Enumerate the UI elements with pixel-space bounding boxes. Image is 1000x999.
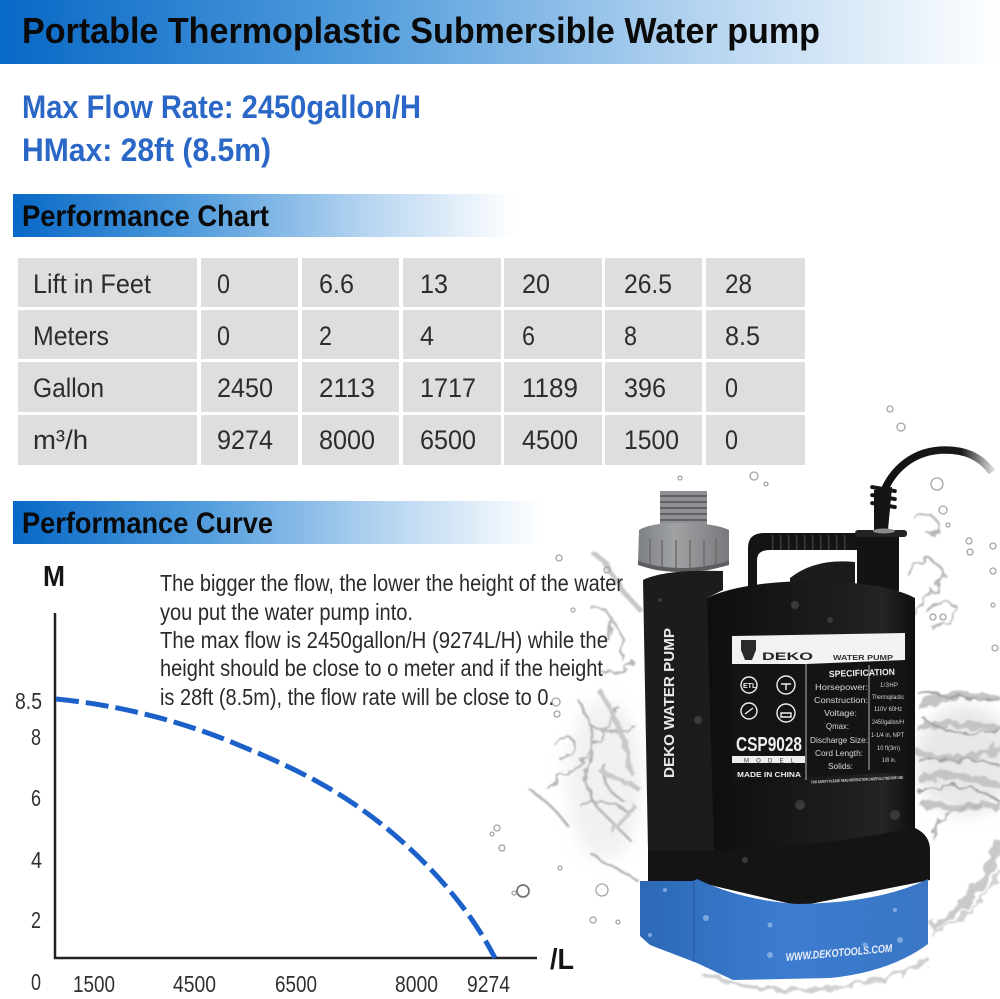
model: CSP9028 xyxy=(736,734,802,756)
performance table: 0 xyxy=(725,425,738,455)
spec table: Qmax: xyxy=(826,722,849,731)
specification label xyxy=(732,633,905,785)
outlet column xyxy=(643,571,723,850)
y axis tick labels: 2 xyxy=(31,907,41,933)
performance table: 2450 xyxy=(217,373,273,403)
performance table: 0 xyxy=(217,269,230,299)
base web address: WWW.DEKOTOOLS.COM xyxy=(785,943,894,964)
y axis tick labels: 4 xyxy=(31,847,42,873)
spec table xyxy=(810,667,904,771)
performance table: 4500 xyxy=(522,425,578,455)
spec table: SPECIFICATION xyxy=(829,667,895,679)
specification label: FOR SAFETY PLEASE READ INSTRUCTION CAREFULLY BEFORE USE xyxy=(811,775,903,785)
section heading: Performance Chart xyxy=(13,194,515,237)
performance table: 1500 xyxy=(624,425,679,455)
key specs text: HMax: 28ft (8.5m) xyxy=(22,132,271,168)
spec table: Solids: xyxy=(828,762,853,771)
explanatory text: The bigger the flow, the lower the height of the water xyxy=(160,570,623,596)
certification icons xyxy=(741,676,795,722)
side text: DEKO WATER PUMP xyxy=(661,628,678,778)
power cable xyxy=(882,450,992,496)
key specs text: Max Flow Rate: 2450gallon/H xyxy=(22,89,421,125)
performance table: 8000 xyxy=(319,425,375,455)
x axis unit: /L xyxy=(550,944,574,976)
main body xyxy=(707,581,915,870)
performance table: 9274 xyxy=(217,425,273,455)
specification label: MODEL xyxy=(744,758,795,764)
performance table: 2113 xyxy=(319,373,375,403)
handle xyxy=(748,528,907,592)
specification label: MADE IN CHINA xyxy=(737,772,801,779)
section heading: Performance Curve: Performance Curve xyxy=(22,507,273,540)
spec table: 110V 60Hz xyxy=(874,707,902,713)
water pump illustration xyxy=(638,450,992,980)
gray union nut xyxy=(638,523,729,572)
spec table: Construction: xyxy=(814,696,868,705)
water splash background xyxy=(490,406,1000,990)
dashed curve xyxy=(56,699,495,958)
y axis tick labels: 8.5 xyxy=(15,688,42,714)
spec table: 1-1/4 in. NPT xyxy=(871,733,904,739)
spec table: Discharge Size: xyxy=(810,736,868,745)
y axis tick labels: 8 xyxy=(31,724,41,750)
specification label: WATER PUMP xyxy=(833,655,893,662)
header band: title xyxy=(0,0,1000,64)
spec table: 1/3HP xyxy=(880,683,898,689)
spec table: 1/8 in. xyxy=(882,758,896,764)
performance table: 2 xyxy=(319,321,332,351)
explanatory text: is 28ft (8.5m), the flow rate will be close to 0. xyxy=(160,684,554,710)
section heading: Performance Chart: Performance Chart xyxy=(22,200,269,233)
cable strain relief xyxy=(870,485,897,530)
performance table: 6.6 xyxy=(319,269,354,299)
performance table: 0 xyxy=(725,373,738,403)
y axis tick labels: 6 xyxy=(31,785,41,811)
axes xyxy=(55,613,537,958)
water droplets xyxy=(648,888,903,958)
performance table: m³/h xyxy=(33,425,88,455)
performance table: 20 xyxy=(522,269,550,299)
title: Portable Thermoplastic Submersible Water pump xyxy=(22,10,820,51)
x axis tick labels: 9274 xyxy=(467,971,510,997)
performance table: 4 xyxy=(420,321,434,351)
spec table: Voltage: xyxy=(824,709,857,718)
performance table: 6500 xyxy=(420,425,476,455)
spec table: Thermoplastic xyxy=(872,695,904,701)
x axis tick labels: 6500 xyxy=(275,971,317,997)
performance table: 8 xyxy=(624,321,637,351)
key specs text xyxy=(22,89,421,168)
spec table: 2450gallon/H xyxy=(872,720,904,726)
explanatory text xyxy=(160,570,623,710)
x axis tick labels xyxy=(73,971,510,997)
y axis tick labels: 0 xyxy=(31,969,41,995)
water bubbles xyxy=(490,406,998,924)
black flange xyxy=(648,828,930,906)
performance table: 396 xyxy=(624,373,666,403)
performance table: 28 xyxy=(725,269,752,299)
performance table: 1189 xyxy=(522,373,578,403)
spec table: 10 ft(3m) xyxy=(877,746,900,752)
x axis tick labels: 1500 xyxy=(73,971,115,997)
x axis tick labels: 8000 xyxy=(395,971,438,997)
brand logo: DEKO xyxy=(762,651,814,663)
y axis tick labels xyxy=(15,688,42,995)
performance table: 0 xyxy=(217,321,230,351)
performance table: 8.5 xyxy=(725,321,760,351)
threaded outlet xyxy=(660,491,707,525)
section heading: Performance Curve xyxy=(13,501,543,544)
explanatory text: you put the water pump into. xyxy=(160,599,413,625)
blue base xyxy=(640,879,928,980)
performance table: Meters xyxy=(33,321,109,351)
brand logo xyxy=(741,640,814,663)
performance table: Lift in Feet xyxy=(33,269,151,299)
performance table: 6 xyxy=(522,321,535,351)
performance table: 26.5 xyxy=(624,269,672,299)
spec table: Cord Length: xyxy=(815,749,863,758)
specification label: ETL xyxy=(743,683,757,690)
x axis tick labels: 4500 xyxy=(173,971,216,997)
spec table: Horsepower: xyxy=(815,683,868,692)
explanatory text: The max flow is 2450gallon/H (9274L/H) while the xyxy=(160,627,608,653)
performance table: 1717 xyxy=(420,373,476,403)
performance table xyxy=(18,258,805,465)
soft mist behind the splash xyxy=(567,700,1000,860)
performance table: Gallon xyxy=(33,373,104,403)
performance curve chart xyxy=(15,561,574,997)
explanatory text: height should be close to o meter and if the height xyxy=(160,655,604,681)
performance table: 13 xyxy=(420,269,448,299)
y axis title: M xyxy=(43,561,65,593)
